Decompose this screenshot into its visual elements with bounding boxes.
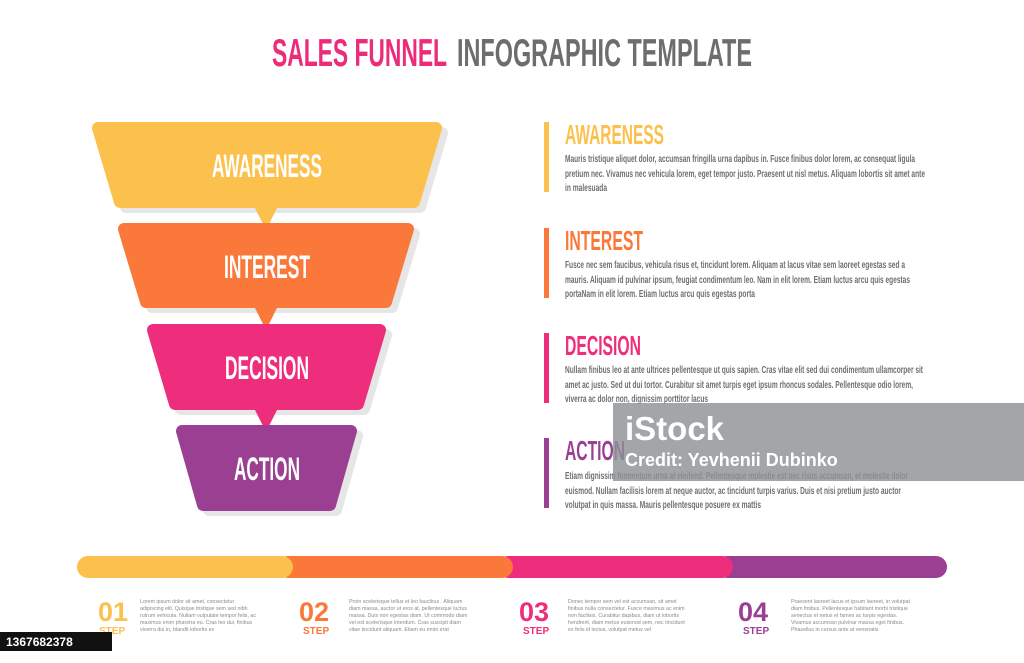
step 02 xyxy=(299,597,468,637)
step 04: Phasellus in cursus ante at venenatis xyxy=(791,627,879,633)
step 02: STEP xyxy=(303,626,329,637)
step 03: ex felis id lectus, volutpat metus vel xyxy=(568,627,651,633)
text block: interest: INTEREST xyxy=(565,225,643,256)
step 04: Praesent laoreet lacus et ipsum laoreet, in volutpat xyxy=(791,599,910,605)
watermark xyxy=(613,403,1024,481)
text block: action: volutpat in quis massa. Mauris pellentesque posuere ex mattis xyxy=(565,500,761,511)
step 03 xyxy=(519,597,685,637)
text block: decision xyxy=(544,330,923,405)
step 04 xyxy=(738,597,910,637)
title xyxy=(272,32,752,75)
title: INFOGRAPHIC TEMPLATE xyxy=(457,32,752,75)
text block: decision: DECISION xyxy=(565,330,641,361)
step 03: non facilisis. Curabitur dapibus, diam ut lobortis xyxy=(568,613,679,619)
step 02: Proin scelerisque tellus et leo faucibus . Aliquam xyxy=(349,599,463,605)
id label xyxy=(0,632,112,651)
step 02: massa. Duis non egestas diam. Ut commodo diam xyxy=(349,613,468,619)
funnel stage: awareness xyxy=(98,128,442,230)
text block: action xyxy=(544,435,908,511)
step 04: diam finibus. Pellentesque habitant morbi tristique xyxy=(791,606,908,612)
id label: 1367682378 xyxy=(6,635,73,649)
text block: awareness xyxy=(544,119,925,194)
funnel stage: decision xyxy=(153,330,386,432)
funnel xyxy=(98,128,442,510)
step 01: adipiscing elit. Quisque tristique sem sed nibh xyxy=(140,606,248,612)
funnel stage: decision: DECISION xyxy=(225,350,309,386)
step 01: STEP xyxy=(99,626,125,637)
progress bar xyxy=(77,556,947,578)
funnel stage: action xyxy=(182,431,357,510)
step 03: 03 xyxy=(519,597,549,627)
text block: decision: viverra ac dolor non, dignissim porttitor lacus xyxy=(565,394,708,405)
title: SALES FUNNEL xyxy=(272,32,447,75)
step 01: maximus enim pharetra eu. Cras leo dui, finibus xyxy=(140,620,253,626)
step 01: viverra dui in, blandit lobortis ex xyxy=(140,627,215,633)
step 01 xyxy=(98,597,256,637)
step 02: vel est scelerisque interdum. Cras suscipit diam xyxy=(349,620,461,626)
step 01: Lorem ipsum dolor sit amet, consectetur xyxy=(140,599,234,605)
step 03: Donec tempor sem vel est accumsan, sit amet xyxy=(568,599,677,605)
text block: action: ACTION xyxy=(565,435,625,466)
funnel stage: action: ACTION xyxy=(234,451,300,487)
step 04: Vivamus accumsan pulvinar massa eget finibus. xyxy=(791,620,904,626)
step 03: finibus nulla consectetur. Fusce maximus ac enim xyxy=(568,606,685,612)
watermark: iStock xyxy=(625,410,725,447)
step 04: senectus et netus et fames ac turpis egestas. xyxy=(791,613,897,619)
step 03: STEP xyxy=(523,626,549,637)
step 02: 02 xyxy=(299,597,329,627)
funnel stage: interest: INTEREST xyxy=(224,249,310,285)
step 04: STEP xyxy=(743,626,769,637)
step 03: hendrerit, diam metus euismod sem, nec tincidunt xyxy=(568,620,685,626)
text block: awareness: in malesuada xyxy=(565,183,607,194)
funnel stage: awareness: AWARENESS xyxy=(212,148,322,184)
funnel stage: interest xyxy=(124,229,414,330)
step 01: 01 xyxy=(98,597,128,627)
step 02: diam massa, auctor ut eros at, pellentesque luctus xyxy=(349,606,467,612)
text block: interest xyxy=(544,225,910,300)
step 04: 04 xyxy=(738,597,768,627)
step 02: vitae tincidunt aliquam. Etiam eu enim erat xyxy=(349,627,449,633)
watermark: Credit: Yevhenii Dubinko xyxy=(625,450,838,470)
text block: interest: portaNam in elit lorem. Etiam luctus arcu quis egestas porta xyxy=(565,289,755,300)
text block: awareness: AWARENESS xyxy=(565,119,664,150)
step 01: rutrum vehicula. Nullam vulputate tempor felis, ac xyxy=(140,613,256,619)
